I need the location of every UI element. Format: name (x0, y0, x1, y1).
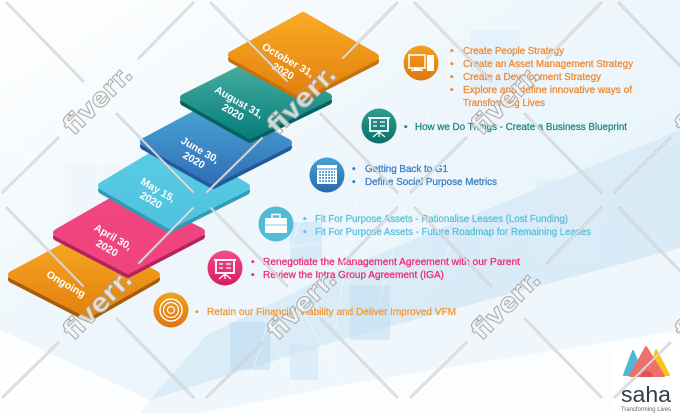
watermark: fiverr grid: fiverr. (465, 264, 547, 346)
text: October milestones: • (450, 59, 454, 70)
text: October milestones: Create People Strategy (463, 46, 565, 57)
logo: saha: saha (621, 382, 672, 407)
step: April 30, 2020: 2020 (94, 237, 120, 260)
text: June milestones (352, 164, 497, 188)
text: May milestones: Fit For Purpose Assets - Rationalise Leases (Lost Funding) (315, 214, 568, 225)
logo: saha: Transforming Lives (621, 406, 672, 413)
text: May milestones: • (303, 227, 307, 238)
step: August 31, 2020 (184, 61, 328, 139)
text: October milestones: Create a Development Strategy (463, 72, 602, 83)
icon: pink presentation board (208, 250, 242, 286)
text: May milestones: • (303, 214, 307, 225)
text: June milestones: • (352, 164, 356, 175)
text: April milestones (251, 257, 520, 281)
text: October milestones: Explore and define innovative ways of (463, 85, 632, 96)
logo: saha (612, 345, 680, 413)
icon: teal presentation board (362, 108, 396, 144)
watermark: fiverr grid: fiverr. (57, 59, 139, 141)
step: August 31, 2020: 2020 (220, 101, 246, 124)
text: June milestones: Getting Back to G1 (365, 164, 448, 175)
text: October milestones: Create an Asset Management Strategy (463, 59, 634, 70)
step: June 30, 2020 (144, 104, 288, 185)
icon: target (154, 292, 188, 328)
step: May 15, 2020: 2020 (138, 189, 164, 212)
text: ongoing milestone: • (195, 307, 199, 318)
text: October milestones: • (450, 46, 454, 57)
step: October 31, 2020: 2020 (270, 60, 296, 83)
watermark: fiverr grid: fiverr. (261, 59, 343, 141)
text: April milestones: • (251, 270, 255, 281)
step: June 30, 2020: June 30, (179, 135, 221, 166)
text: June milestones: Define Social Purpose Metrics (365, 177, 497, 188)
step: October 31, 2020 (232, 16, 375, 98)
step: April 30, 2020: April 30, (92, 222, 134, 253)
icon: calendar (310, 158, 344, 192)
text: October milestones: Transforming Lives (463, 98, 545, 109)
text: October milestones (450, 46, 634, 109)
step: June 30, 2020: 2020 (181, 149, 207, 172)
watermark: fiverr grid: fiverr. (465, 59, 547, 141)
text: May milestones: Fit For Purpose Assets - Future Roadmap for Remaining Leases (315, 227, 591, 238)
text: October milestones: • (450, 72, 454, 83)
text: May milestones (303, 214, 591, 238)
icon: computer (404, 46, 438, 80)
step: October 31, 2020: October 31, (260, 41, 316, 80)
text: June milestones: • (352, 177, 356, 188)
step: Ongoing (12, 236, 156, 318)
step: April 30, 2020 (57, 194, 201, 274)
icon: briefcase (258, 206, 294, 242)
text: ongoing milestone: Retain our Financial Viability and Deliver Improved VFM (207, 307, 456, 318)
text: October milestones: • (450, 85, 454, 96)
text: August milestone: How we Do Things - Create a Business Blueprint (415, 122, 627, 133)
step: May 15, 2020 (102, 144, 246, 229)
step: August 31, 2020: August 31, (213, 84, 265, 121)
step: May 15, 2020: May 15, (138, 176, 177, 205)
watermark: fiverr grid: fiverr. (57, 264, 139, 346)
text: August milestone: • (404, 122, 408, 133)
text: April milestones: Renegotiate the Management Agreement with our Parent (263, 257, 520, 268)
step: Ongoing: Ongoing (44, 268, 87, 300)
watermark: fiverr grid: fiverr. (261, 264, 343, 346)
text: April milestones: • (251, 257, 255, 268)
text: April milestones: Review the Intra Group Agreement (IGA) (263, 270, 444, 281)
